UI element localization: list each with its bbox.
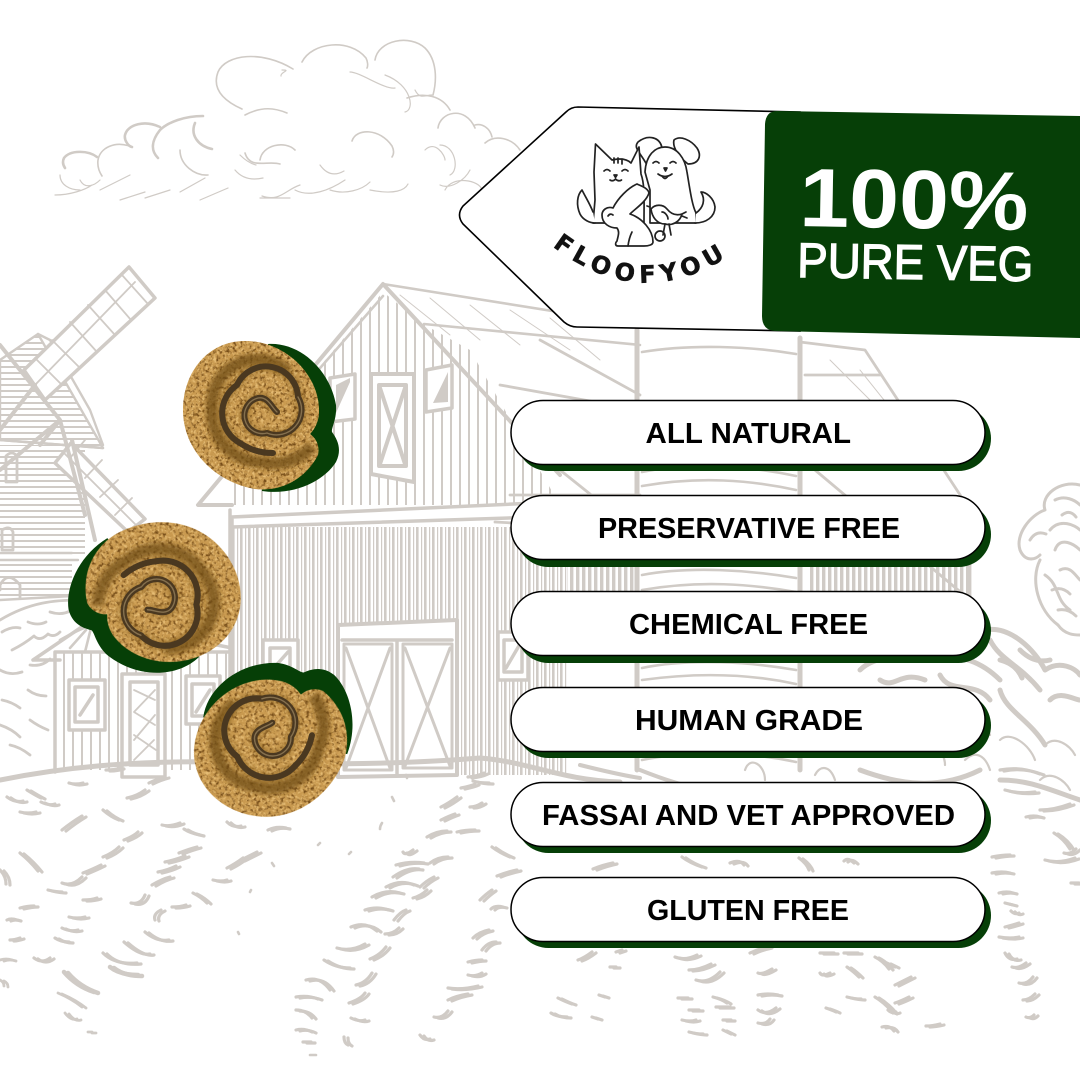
pill: chemical free: CHEMICAL FREE xyxy=(629,609,868,641)
field furrows xyxy=(0,768,1080,1055)
tag white pointer xyxy=(460,107,800,331)
pill: chemical free xyxy=(511,592,991,663)
ground line xyxy=(0,758,620,782)
small shed xyxy=(33,620,232,777)
pill: preservative free xyxy=(511,496,991,567)
logo wordmark: FLOOFYOU xyxy=(554,233,722,284)
barn lower wall xyxy=(230,500,970,777)
barn windows xyxy=(330,365,452,482)
cookie top xyxy=(183,341,339,492)
barn door xyxy=(338,620,457,777)
cookie middle xyxy=(47,486,267,706)
barn upper gable xyxy=(198,284,640,505)
logo tag xyxy=(458,106,801,332)
logo animals xyxy=(578,137,715,246)
100% heading: 100% xyxy=(799,151,1029,248)
pill: fassai and vet approved xyxy=(511,782,991,853)
green banner xyxy=(762,111,1080,338)
logo dog xyxy=(636,137,715,223)
logo bird xyxy=(647,205,687,235)
pill: human grade: HUMAN GRADE xyxy=(635,705,863,737)
pill: all natural: ALL NATURAL xyxy=(646,418,851,450)
cookie bottom xyxy=(182,647,364,832)
right bushes xyxy=(580,484,1080,800)
pure veg subheading: PURE VEG xyxy=(797,234,1034,292)
pill: preservative free: PRESERVATIVE FREE xyxy=(598,513,900,545)
right barn wing xyxy=(495,340,970,600)
pill: all natural xyxy=(511,400,991,471)
hill and roof dashes xyxy=(0,600,80,755)
silo xyxy=(637,330,800,770)
benefit pills xyxy=(511,400,991,948)
pill: gluten free: GLUTEN FREE xyxy=(647,895,849,927)
windmill xyxy=(0,267,155,600)
logo cat xyxy=(578,144,644,223)
logo rabbit xyxy=(602,184,665,246)
pill: fassai and vet approved: FASSAI AND VET APPROVED xyxy=(542,800,955,832)
cloud xyxy=(55,40,520,200)
pill: gluten free xyxy=(511,878,991,948)
pill: human grade xyxy=(511,688,991,758)
